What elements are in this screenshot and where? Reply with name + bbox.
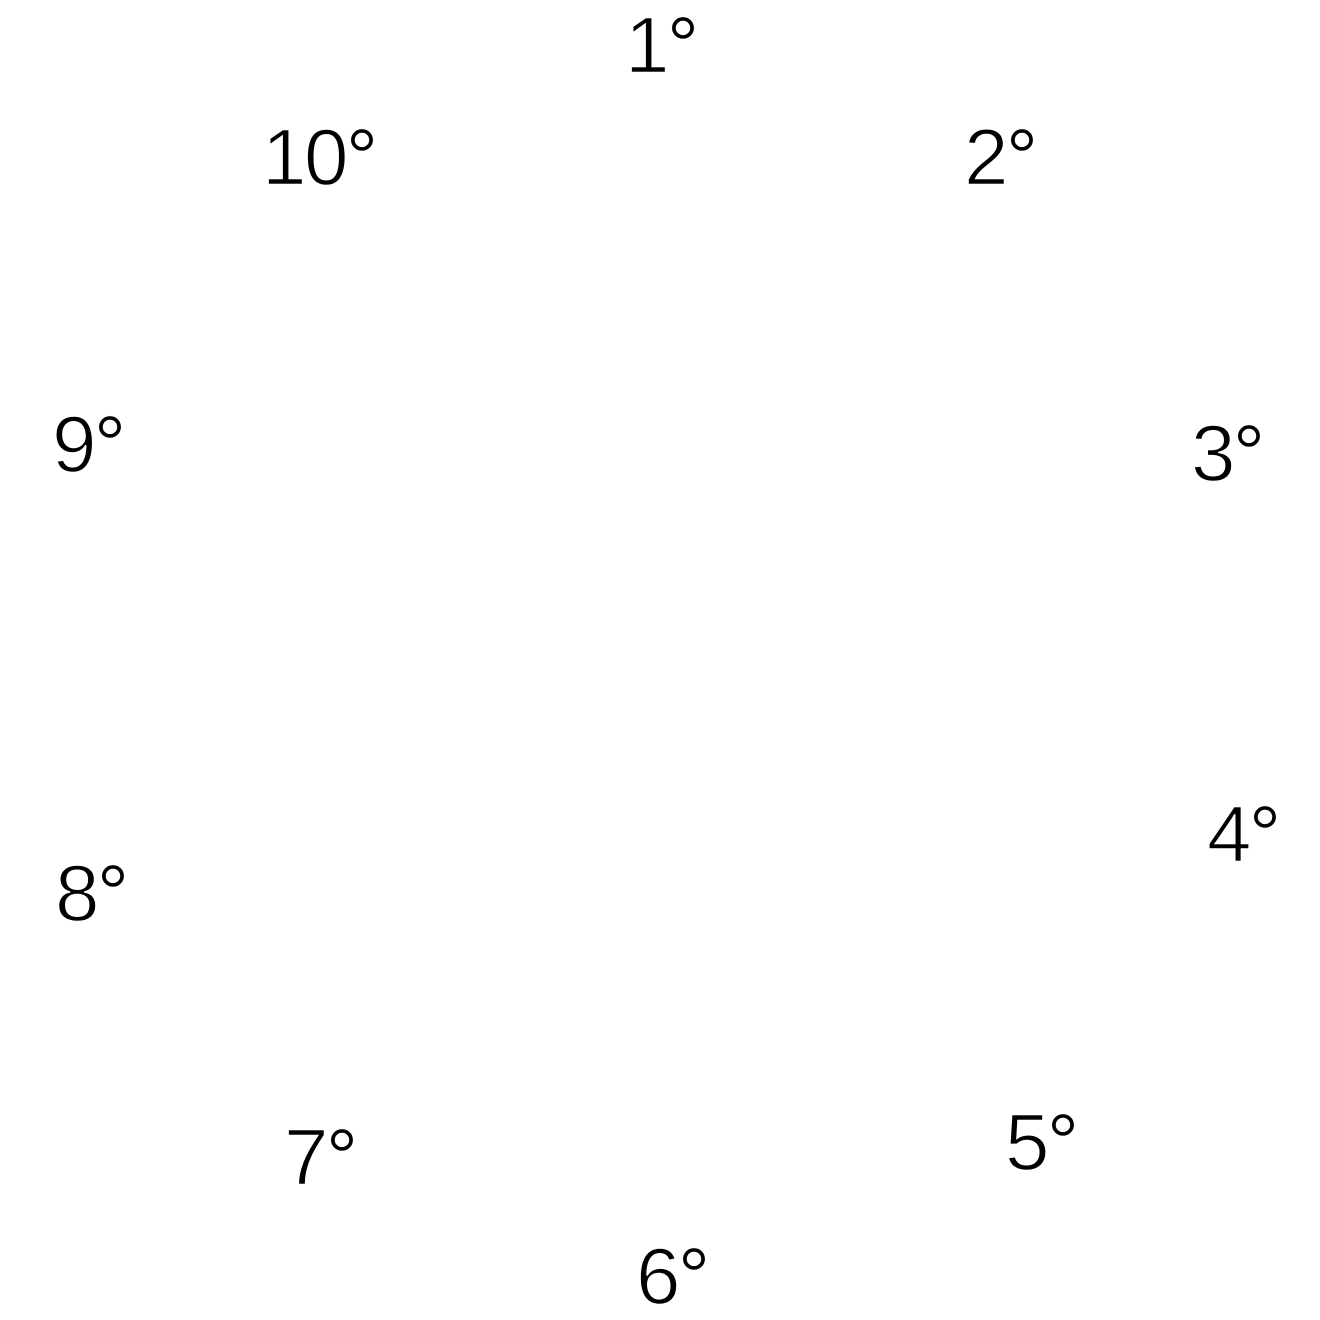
label: 2nd: 2° [964,112,1036,202]
label: 4th: 4° [1207,790,1278,878]
label: 6th: 6° [636,1232,708,1320]
label: 9th: 9° [52,400,124,488]
label: 8th: 8° [55,848,126,938]
label: 1st: 1° [625,0,696,90]
label: 7th: 7° [284,1112,356,1202]
label: 10th: 10° [262,112,375,202]
label: 5th: 5° [1005,1098,1076,1186]
label: 3rd: 3° [1191,408,1262,498]
